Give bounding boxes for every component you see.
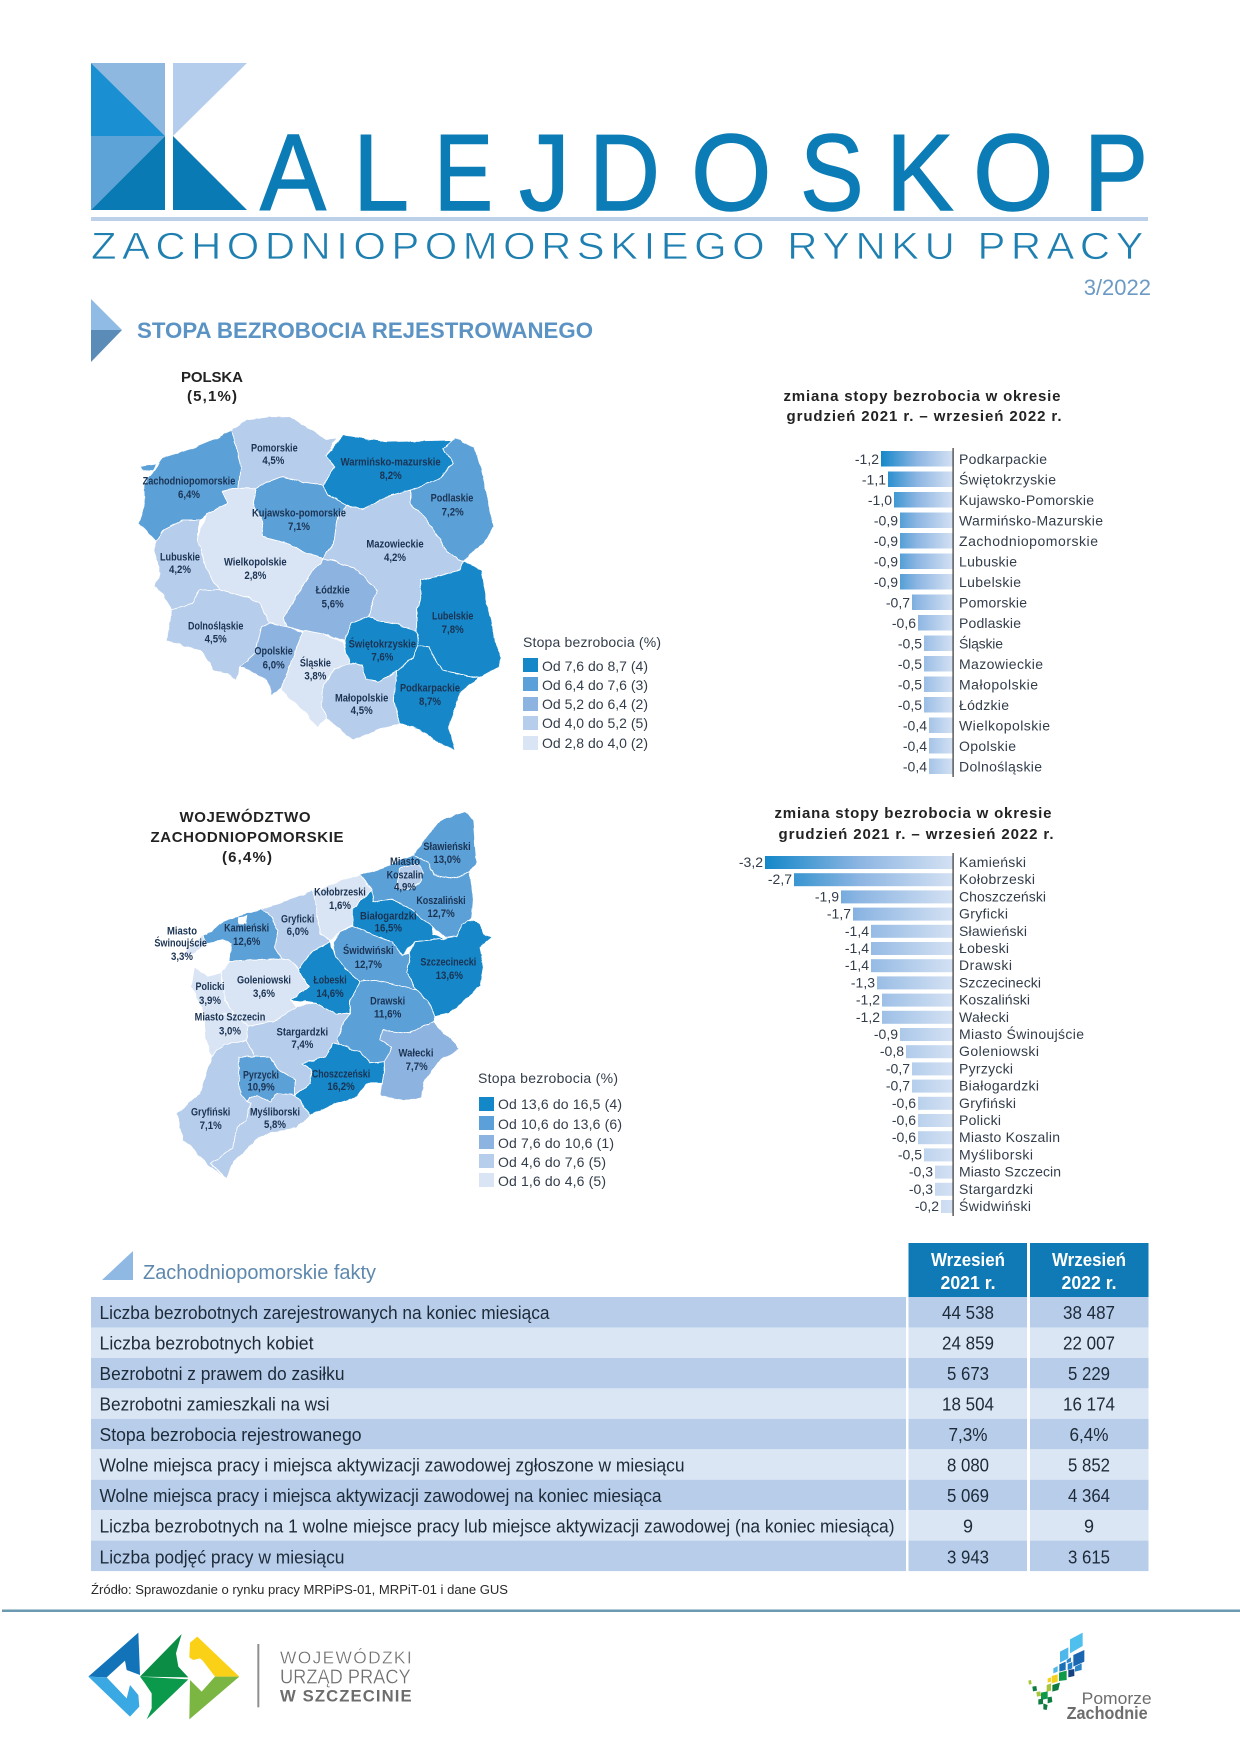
bar: Lubuskie: -0,9 bbox=[874, 554, 898, 570]
logo: Wojewódzki Urząd Pracy w Szczecinie: URZĄD PRACY bbox=[280, 1665, 411, 1688]
bar: Gryfiński: -0,6 bbox=[892, 1095, 916, 1111]
map labels: Śląskie bbox=[300, 656, 331, 669]
row: Stopa bezrobocia rejestrowanego: 7,3% bbox=[948, 1425, 988, 1445]
map labels: Podkarpackie bbox=[400, 682, 460, 694]
legend: województwo: Od 4,6 do 7,6 (5) bbox=[498, 1154, 606, 1170]
bar: Małopolskie: Małopolskie bbox=[959, 676, 1038, 692]
footer rule bbox=[2, 1610, 1240, 1612]
heading: Polska: (5,1%) bbox=[187, 388, 237, 405]
district labels: 7,4% bbox=[291, 1039, 313, 1051]
bar: Szczecinecki: Szczecinecki bbox=[959, 974, 1041, 990]
row: Liczba podjęć pracy w miesiącu: 3 943 bbox=[947, 1548, 989, 1568]
logo: Wojewódzki Urząd Pracy w Szczecinie: W SZCZECINIE bbox=[280, 1687, 412, 1706]
bar: Szczecinecki: -1,3 bbox=[851, 974, 875, 990]
bar: Koszaliński bbox=[856, 992, 1030, 1008]
bar: Śląskie bbox=[898, 634, 1003, 652]
legend: województwo: Od 1,6 do 4,6 (5) bbox=[498, 1173, 606, 1189]
bar: Opolskie: -0,4 bbox=[903, 738, 927, 754]
map labels: 7,6% bbox=[371, 651, 393, 663]
map labels: Kujawsko-pomorskie bbox=[252, 508, 346, 520]
heading: Polska: POLSKA bbox=[181, 369, 243, 386]
chart heading: województwo bbox=[774, 805, 1054, 843]
bar: Kamieński: Kamieński bbox=[959, 854, 1026, 870]
choropleth map: Polska bbox=[138, 417, 500, 750]
district labels: Kołobrzeski bbox=[314, 887, 366, 899]
bar: Kujawsko-Pomorskie: -1,0 bbox=[868, 492, 892, 508]
bar: Białogardzki bbox=[886, 1078, 1039, 1094]
map labels: 3,8% bbox=[304, 671, 326, 683]
bar: Szczecinecki bbox=[851, 974, 1041, 990]
map labels: Łódzkie bbox=[316, 584, 350, 596]
bar: Kamieński: -3,2 bbox=[739, 854, 763, 870]
bar chart: województwo bbox=[739, 853, 1084, 1216]
bar: Dolnośląskie: Dolnośląskie bbox=[959, 758, 1042, 774]
map labels: Wielkopolskie bbox=[224, 557, 287, 569]
district labels: 3,0% bbox=[219, 1025, 241, 1037]
row: Liczba bezrobotnych na 1 wolne miejsce: Liczba bezrobotnych na 1 wolne miejsce pracy lub miejsce aktywizacji zawodowej (na koniec miesiąca) bbox=[100, 1516, 894, 1536]
bar: Policki: Policki bbox=[959, 1112, 1001, 1128]
district labels: Stargardzki bbox=[276, 1026, 328, 1038]
district labels: Koszalin bbox=[387, 869, 423, 881]
bar: Pomorskie: -0,7 bbox=[886, 594, 910, 610]
bar: Świdwiński: Świdwiński bbox=[959, 1197, 1031, 1214]
bar: Sławieński: Sławieński bbox=[959, 923, 1027, 939]
title: D bbox=[589, 112, 660, 234]
bar: Mazowieckie: -0,5 bbox=[898, 656, 922, 672]
district labels: Szczecinecki bbox=[420, 956, 476, 968]
row: Bezrobotni zamieszkali na wsi: 16 174 bbox=[1063, 1394, 1115, 1414]
map labels: 5,6% bbox=[322, 598, 344, 610]
map labels: 6,4% bbox=[178, 489, 200, 501]
legend: województwo: Od 7,6 do 10,6 (1) bbox=[498, 1135, 614, 1151]
row: Wolne miejsca na koniec miesiąca bbox=[91, 1480, 1148, 1510]
district labels: Drawski bbox=[370, 995, 405, 1007]
chart heading: województwo: zmiana stopy bezrobocia w okresie bbox=[774, 805, 1052, 822]
heading: Polska bbox=[181, 369, 243, 405]
district labels: Miasto bbox=[167, 925, 197, 937]
bar: Mazowieckie bbox=[898, 656, 1043, 672]
table header: Wrzesień 2022 r.: 2022 r. bbox=[1062, 1273, 1116, 1293]
bar: Wielkopolskie: -0,4 bbox=[903, 718, 927, 734]
map labels: Dolnośląskie bbox=[188, 620, 243, 632]
row: Bezrobotni z prawem do zasiłku: Bezrobotni z prawem do zasiłku bbox=[100, 1364, 344, 1384]
map labels: 7,8% bbox=[442, 624, 464, 636]
bar: Policki: -0,6 bbox=[892, 1112, 916, 1128]
bar: Stargardzki: -0,3 bbox=[909, 1181, 933, 1197]
district labels: Sławieński bbox=[423, 841, 471, 853]
map labels: 4,5% bbox=[351, 705, 373, 717]
district labels: Łobeski bbox=[313, 974, 347, 986]
bar: Stargardzki bbox=[909, 1181, 1033, 1197]
bar: Łódzkie: Łódzkie bbox=[959, 697, 1009, 713]
map labels bbox=[143, 443, 473, 717]
row: Liczba bezrobotnych zarejestrowanych: 44 538 bbox=[942, 1303, 994, 1323]
bar: Kołobrzeski bbox=[768, 871, 1035, 887]
map labels: Zachodniopomorskie bbox=[143, 475, 235, 487]
title: O bbox=[691, 112, 772, 234]
row: Bezrobotni zamieszkali na wsi bbox=[91, 1388, 1148, 1419]
map labels: 4,2% bbox=[169, 564, 191, 576]
bar: Podkarpackie: -1,2 bbox=[855, 451, 879, 467]
bar: Małopolskie: -0,5 bbox=[898, 676, 922, 692]
row: Liczba bezrobotnych zarejestrowanych bbox=[91, 1297, 1148, 1328]
map labels: 6,0% bbox=[263, 659, 285, 671]
bar: Zachodniopomorskie: -0,9 bbox=[874, 533, 898, 549]
district labels bbox=[154, 841, 476, 1132]
bar: Choszczeński bbox=[815, 888, 1046, 904]
bar: Miasto Koszalin bbox=[892, 1129, 1060, 1145]
bar: Gryficki: Gryficki bbox=[959, 906, 1008, 922]
legend: Polska: Od 6,4 do 7,6 (3) bbox=[542, 677, 648, 693]
logo: Pomorze Zachodnie: Zachodnie bbox=[1067, 1703, 1148, 1723]
district labels: 3,6% bbox=[253, 988, 275, 1000]
facts icon: triangle bbox=[102, 1251, 133, 1280]
map labels: Pomorskie bbox=[251, 443, 298, 455]
bar: Goleniowski: -0,8 bbox=[880, 1043, 904, 1059]
bar: Kołobrzeski: -2,7 bbox=[768, 871, 792, 887]
bar: Goleniowski: Goleniowski bbox=[959, 1043, 1039, 1059]
row: Liczba bezrobotnych kobiet: 24 859 bbox=[942, 1334, 994, 1354]
bar: Kołobrzeski: Kołobrzeski bbox=[959, 871, 1035, 887]
bar: Podlaskie: Podlaskie bbox=[959, 615, 1021, 631]
district labels: 13,0% bbox=[433, 854, 461, 866]
row: Stopa bezrobocia rejestrowanego: Stopa bezrobocia rejestrowanego bbox=[100, 1425, 362, 1445]
bar: Podlaskie bbox=[892, 615, 1021, 631]
subtitle: ZACHODNIOPOMORSKIEGO RYNKU PRACY bbox=[91, 226, 1149, 268]
district labels: Gryfiński bbox=[191, 1106, 230, 1118]
row: Bezrobotni zamieszkali na wsi: 18 504 bbox=[942, 1394, 994, 1414]
map labels: 7,1% bbox=[288, 521, 310, 533]
bar: Pyrzycki: Pyrzycki bbox=[959, 1060, 1013, 1076]
bar: Gryficki bbox=[827, 906, 1008, 922]
row: Bezrobotni z prawem do zasiłku bbox=[91, 1358, 1148, 1388]
bar: Świętokrzyskie: Świętokrzyskie bbox=[959, 470, 1056, 488]
bar: Wałecki bbox=[856, 1009, 1009, 1025]
region shapes bbox=[138, 417, 500, 750]
bar: Myśliborski bbox=[898, 1146, 1033, 1162]
district labels: 5,8% bbox=[264, 1119, 286, 1131]
chart heading: Polska: grudzień 2021 r. – wrzesień 2022 r. bbox=[786, 408, 1062, 425]
bar: Goleniowski bbox=[880, 1043, 1039, 1059]
map labels: Świętokrzyskie bbox=[349, 637, 416, 650]
row: Bezrobotni z prawem do zasiłku: 5 673 bbox=[947, 1364, 989, 1384]
district labels: Policki bbox=[195, 981, 224, 993]
bar: Lubuskie bbox=[874, 554, 1017, 570]
bar: Warmińsko-Mazurskie: -0,9 bbox=[874, 512, 898, 528]
chart heading: Polska: zmiana stopy bezrobocia w okresie bbox=[784, 388, 1060, 405]
bar: Świętokrzyskie bbox=[862, 470, 1056, 488]
bar: Miasto Świnoujście bbox=[874, 1025, 1084, 1042]
bar: Lubelskie: Lubelskie bbox=[959, 574, 1021, 590]
bar: Wałecki: -1,2 bbox=[856, 1009, 880, 1025]
bar: Dolnośląskie: -0,4 bbox=[903, 758, 927, 774]
district labels: Goleniowski bbox=[237, 974, 291, 986]
bar: Opolskie: Opolskie bbox=[959, 738, 1016, 754]
map labels: Mazowieckie bbox=[366, 539, 424, 551]
bar: Pyrzycki: -0,7 bbox=[886, 1060, 910, 1076]
title: O bbox=[973, 112, 1054, 234]
district labels: Miasto bbox=[390, 856, 420, 868]
district labels: Myśliborski bbox=[250, 1106, 300, 1118]
row: Stopa bezrobocia rejestrowanego: 6,4% bbox=[1070, 1425, 1108, 1445]
bar: Dolnośląskie bbox=[903, 758, 1042, 774]
district labels: Koszaliński bbox=[416, 895, 466, 907]
map labels: Małopolskie bbox=[335, 692, 388, 704]
district labels: 16,2% bbox=[327, 1081, 355, 1093]
bar: Podkarpackie: Podkarpackie bbox=[959, 451, 1047, 467]
table header: Wrzesień 2022 r. bbox=[1030, 1243, 1148, 1297]
bar: Gryfiński bbox=[892, 1095, 1016, 1111]
bar: Zachodniopomorskie: Zachodniopomorskie bbox=[959, 533, 1098, 549]
heading: Województwo zachodniopomorskie: WOJEWÓDZTWO bbox=[180, 808, 311, 826]
row: Wolne miejsca zgłoszone w miesiącu: 5 852 bbox=[1068, 1456, 1110, 1476]
bar: Miasto Szczecin bbox=[909, 1164, 1061, 1180]
bar: Kujawsko-Pomorskie bbox=[868, 492, 1094, 508]
district labels: Choszczeński bbox=[312, 1068, 370, 1080]
chart heading: województwo: grudzień 2021 r. – wrzesień 2022 r. bbox=[778, 826, 1054, 843]
bar: Koszaliński: Koszaliński bbox=[959, 992, 1030, 1008]
row: Wolne miejsca zgłoszone w miesiącu: 8 080 bbox=[947, 1456, 989, 1476]
bar: Policki bbox=[892, 1112, 1001, 1128]
title: K bbox=[886, 112, 954, 234]
bar: Warmińsko-Mazurskie bbox=[874, 512, 1103, 528]
legend: Polska: Stopa bezrobocia (%) bbox=[523, 634, 661, 650]
row: Liczba bezrobotnych na 1 wolne miejsce: 9 bbox=[1084, 1516, 1094, 1536]
issue number: 3/2022 bbox=[1084, 275, 1151, 300]
bar: Świdwiński bbox=[915, 1197, 1031, 1214]
row: Wolne miejsca zgłoszone w miesiącu bbox=[91, 1449, 1148, 1480]
bar: Wielkopolskie: Wielkopolskie bbox=[959, 718, 1050, 734]
bar: Gryficki: -1,7 bbox=[827, 906, 851, 922]
bar: Wielkopolskie bbox=[903, 718, 1050, 734]
table header: Wrzesień 2021 r.: 2021 r. bbox=[940, 1273, 996, 1293]
chart heading: Polska bbox=[784, 388, 1062, 425]
district labels: Świnoujście bbox=[154, 937, 207, 950]
row: Liczba bezrobotnych zarejestrowanych: 38 487 bbox=[1063, 1303, 1115, 1323]
map labels: Opolskie bbox=[254, 646, 293, 658]
district labels: 3,3% bbox=[171, 951, 193, 963]
logo: Kalejdoskop K mark bbox=[91, 63, 247, 210]
title: L bbox=[353, 112, 409, 234]
bar: Wałecki: Wałecki bbox=[959, 1009, 1009, 1025]
bar: Lubelskie bbox=[874, 574, 1021, 590]
district labels: 12,7% bbox=[427, 908, 455, 920]
section heading: STOPA BEZROBOCIA REJESTROWANEGO bbox=[137, 318, 593, 343]
title: E bbox=[434, 112, 493, 234]
bar: Miasto Szczecin: -0,3 bbox=[909, 1164, 933, 1180]
bar: Pomorskie bbox=[886, 594, 1027, 610]
map labels: 2,8% bbox=[244, 570, 266, 582]
legend: Polska: Od 5,2 do 6,4 (2) bbox=[542, 696, 648, 712]
district labels: Pyrzycki bbox=[243, 1069, 279, 1081]
row: Liczba bezrobotnych kobiet: 22 007 bbox=[1063, 1334, 1115, 1354]
chart axis bbox=[952, 448, 954, 777]
bar: Warmińsko-Mazurskie: Warmińsko-Mazurskie bbox=[959, 512, 1103, 528]
bar: Łódzkie bbox=[898, 697, 1009, 713]
bar: Myśliborski: -0,5 bbox=[898, 1146, 922, 1162]
district labels: Kamieński bbox=[224, 922, 269, 934]
legend: województwo: Od 13,6 do 16,5 (4) bbox=[498, 1096, 622, 1112]
bar: Choszczeński: -1,9 bbox=[815, 888, 839, 904]
bar: Zachodniopomorskie bbox=[874, 533, 1098, 549]
row: Liczba bezrobotnych kobiet bbox=[91, 1327, 1148, 1358]
bar: Białogardzki: -0,7 bbox=[886, 1078, 910, 1094]
logo: Pomorze Zachodnie: Pomorze bbox=[1082, 1689, 1152, 1708]
chart axis bbox=[952, 853, 954, 1216]
bar: Białogardzki: Białogardzki bbox=[959, 1078, 1039, 1094]
row: Liczba bezrobotnych na 1 wolne miejsce: 9 bbox=[963, 1516, 973, 1536]
district labels: 10,9% bbox=[247, 1082, 275, 1094]
heading: Województwo zachodniopomorskie: (6,4%) bbox=[222, 849, 272, 866]
bar: Kamieński bbox=[739, 854, 1026, 870]
bar: Kujawsko-Pomorskie: Kujawsko-Pomorskie bbox=[959, 492, 1094, 508]
bar: Świdwiński: -0,2 bbox=[915, 1198, 939, 1214]
bar: Myśliborski: Myśliborski bbox=[959, 1146, 1033, 1162]
legend: województwo bbox=[478, 1070, 622, 1189]
row: Liczba bezrobotnych zarejestrowanych: Liczba bezrobotnych zarejestrowanych na koniec miesiąca bbox=[100, 1303, 550, 1323]
table header: Wrzesień 2021 r. bbox=[908, 1243, 1027, 1297]
choropleth map: województwo zachodniopomorskie bbox=[154, 812, 492, 1178]
district labels: 12,7% bbox=[355, 959, 382, 971]
bar: Sławieński: -1,4 bbox=[845, 923, 869, 939]
bar: Choszczeński: Choszczeński bbox=[959, 888, 1046, 904]
district labels: 12,6% bbox=[233, 936, 260, 948]
bar: Śląskie: Śląskie bbox=[959, 634, 1003, 652]
bar: Podlaskie: -0,6 bbox=[892, 615, 916, 631]
bar: Koszaliński: -1,2 bbox=[856, 992, 880, 1008]
district labels: Białogardzki bbox=[360, 910, 417, 922]
bar: Małopolskie bbox=[898, 676, 1038, 692]
row: Liczba bezrobotnych kobiet: Liczba bezrobotnych kobiet bbox=[100, 1334, 314, 1354]
bar: Pomorskie: Pomorskie bbox=[959, 594, 1027, 610]
bar: Łódzkie: -0,5 bbox=[898, 697, 922, 713]
bar: Lubuskie: Lubuskie bbox=[959, 554, 1017, 570]
map labels: 4,5% bbox=[262, 455, 284, 467]
row: Liczba podjęć pracy w miesiącu bbox=[91, 1541, 1148, 1571]
bar: Drawski: Drawski bbox=[959, 957, 1012, 973]
bar: Pyrzycki bbox=[886, 1060, 1013, 1076]
bar: Lubelskie: -0,9 bbox=[874, 574, 898, 590]
title rule bbox=[91, 217, 1148, 221]
legend: Polska: Od 4,0 do 5,2 (5) bbox=[542, 715, 648, 731]
bar: Sławieński bbox=[845, 923, 1027, 939]
bar: Miasto Świnoujście: -0,9 bbox=[874, 1026, 898, 1042]
row: Stopa bezrobocia rejestrowanego bbox=[91, 1419, 1148, 1449]
district labels: 4,9% bbox=[394, 882, 416, 894]
row: Wolne miejsca zgłoszone w miesiącu: Wolne miejsca pracy i miejsca aktywizacji zawodowej zgłoszone w miesiącu bbox=[100, 1456, 684, 1476]
district labels: 7,1% bbox=[200, 1120, 222, 1132]
district labels: Miasto Szczecin bbox=[195, 1011, 265, 1023]
row: Liczba podjęć pracy w miesiącu: Liczba podjęć pracy w miesiącu bbox=[100, 1548, 344, 1568]
legend: województwo: Stopa bezrobocia (%) bbox=[478, 1070, 618, 1086]
district labels: Gryficki bbox=[281, 913, 314, 925]
legend: województwo: Od 10,6 do 13,6 (6) bbox=[498, 1116, 622, 1132]
bar: Łobeski: -1,4 bbox=[845, 940, 869, 956]
bar: Podkarpackie bbox=[855, 451, 1047, 467]
logo: Wojewódzki Urząd Pracy w Szczecinie bbox=[88, 1633, 412, 1719]
legend: Polska: Od 2,8 do 4,0 (2) bbox=[542, 735, 648, 751]
title: S bbox=[800, 112, 864, 234]
bar: Opolskie bbox=[903, 738, 1016, 754]
district labels: 3,9% bbox=[199, 995, 221, 1007]
map labels: Lubelskie bbox=[432, 610, 473, 622]
bar: Świętokrzyskie: -1,1 bbox=[862, 472, 886, 488]
row: Bezrobotni z prawem do zasiłku: 5 229 bbox=[1068, 1364, 1110, 1384]
bar chart: Polska bbox=[855, 448, 1103, 777]
table: Zachodniopomorskie fakty bbox=[91, 1243, 1148, 1571]
legend: Polska: Od 7,6 do 8,7 (4) bbox=[542, 658, 648, 674]
source note: Źródło: Sprawozdanie o rynku pracy MRPiPS-01, MRPiT-01 i dane GUS bbox=[91, 1582, 508, 1597]
legend: Polska bbox=[523, 634, 661, 751]
bar: Miasto Szczecin: Miasto Szczecin bbox=[959, 1164, 1061, 1180]
bar: Mazowieckie: Mazowieckie bbox=[959, 656, 1043, 672]
bar: Miasto Koszalin: -0,6 bbox=[892, 1129, 916, 1145]
heading: Województwo zachodniopomorskie bbox=[150, 808, 344, 866]
logo: Wojewódzki Urząd Pracy w Szczecinie: WOJEWÓDZKI bbox=[280, 1647, 412, 1667]
title: A bbox=[260, 112, 326, 234]
bar: Drawski bbox=[845, 957, 1012, 973]
bar: Miasto Koszalin: Miasto Koszalin bbox=[959, 1129, 1060, 1145]
bar: Stargardzki: Stargardzki bbox=[959, 1181, 1033, 1197]
district shapes bbox=[177, 812, 492, 1178]
district labels: 14,6% bbox=[316, 988, 344, 1000]
district labels: 13,6% bbox=[436, 970, 463, 982]
row: Liczba bezrobotnych na 1 wolne miejsce bbox=[91, 1510, 1148, 1541]
bar: Drawski: -1,4 bbox=[845, 957, 869, 973]
row: Wolne miejsca na koniec miesiąca: Wolne miejsca pracy i miejsca aktywizacji zawodowej na koniec miesiąca bbox=[100, 1486, 662, 1506]
title: J bbox=[519, 112, 570, 234]
district labels: Świdwiński bbox=[343, 944, 394, 957]
facts heading: Zachodniopomorskie fakty bbox=[143, 1262, 376, 1284]
bar: Łobeski: Łobeski bbox=[959, 940, 1009, 956]
heading: Województwo zachodniopomorskie: ZACHODNIOPOMORSKIE bbox=[150, 829, 344, 846]
map labels: 8,7% bbox=[419, 696, 441, 708]
title bbox=[260, 112, 1148, 234]
bar: Miasto Świnoujście: Miasto Świnoujście bbox=[959, 1025, 1084, 1042]
row: Wolne miejsca na koniec miesiąca: 4 364 bbox=[1068, 1486, 1110, 1506]
table header: Wrzesień 2021 r.: Wrzesień bbox=[931, 1250, 1005, 1270]
district labels: 11,6% bbox=[374, 1009, 401, 1021]
row: Bezrobotni zamieszkali na wsi: Bezrobotni zamieszkali na wsi bbox=[100, 1394, 330, 1414]
district labels: 6,0% bbox=[287, 926, 309, 938]
row: Wolne miejsca na koniec miesiąca: 5 069 bbox=[947, 1486, 989, 1506]
district labels: 1,6% bbox=[329, 900, 351, 912]
map labels: 8,2% bbox=[380, 470, 402, 482]
bar: Łobeski bbox=[845, 940, 1009, 956]
district labels: 16,5% bbox=[375, 923, 402, 935]
map labels: 4,5% bbox=[205, 633, 227, 645]
map labels: Warmińsko-mazurskie bbox=[341, 457, 441, 469]
map labels: 4,2% bbox=[384, 552, 406, 564]
bar: Śląskie: -0,5 bbox=[898, 636, 922, 652]
map labels: Podlaskie bbox=[431, 493, 473, 505]
row: Liczba podjęć pracy w miesiącu: 3 615 bbox=[1068, 1548, 1110, 1568]
district labels: Wałecki bbox=[398, 1048, 433, 1060]
bar: Gryfiński: Gryfiński bbox=[959, 1095, 1016, 1111]
map labels: 7,2% bbox=[442, 506, 464, 518]
map labels: Lubuskie bbox=[160, 551, 200, 563]
table header: Wrzesień 2022 r.: Wrzesień bbox=[1052, 1250, 1126, 1270]
logo: Pomorze Zachodnie bbox=[1028, 1633, 1152, 1723]
section icon: arrow bbox=[91, 299, 122, 362]
title: P bbox=[1084, 112, 1148, 234]
district labels: 7,7% bbox=[406, 1061, 428, 1073]
